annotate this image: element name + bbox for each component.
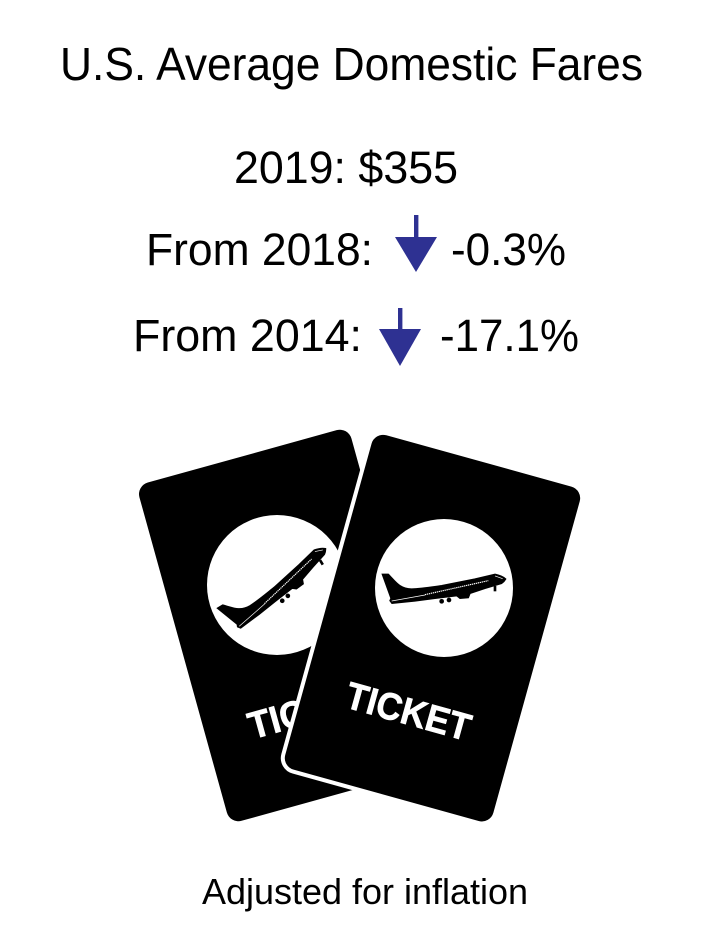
- icon: front ticket: [280, 430, 585, 827]
- change from 2018: -0.3%: [451, 224, 566, 275]
- change from 2018: From 2018:: [146, 224, 373, 275]
- change from 2014: [133, 310, 579, 361]
- change from 2018: [146, 224, 566, 275]
- ticket label front: TICKET: [341, 675, 475, 750]
- change from 2014: -17.1%: [440, 310, 579, 361]
- icon: level plane: [382, 574, 506, 604]
- icon: down arrow 2018: [395, 215, 437, 272]
- icon: down arrow 2014: [379, 308, 421, 366]
- change from 2014: From 2014:: [133, 310, 362, 361]
- icon: back ticket: [136, 427, 442, 824]
- ticket label back: TICKET: [244, 673, 380, 748]
- footnote: Adjusted for inflation: [202, 871, 528, 912]
- fare 2019: 2019: $355: [234, 142, 458, 193]
- title: U.S. Average Domestic Fares: [60, 38, 643, 90]
- icon: climbing plane: [217, 545, 338, 633]
